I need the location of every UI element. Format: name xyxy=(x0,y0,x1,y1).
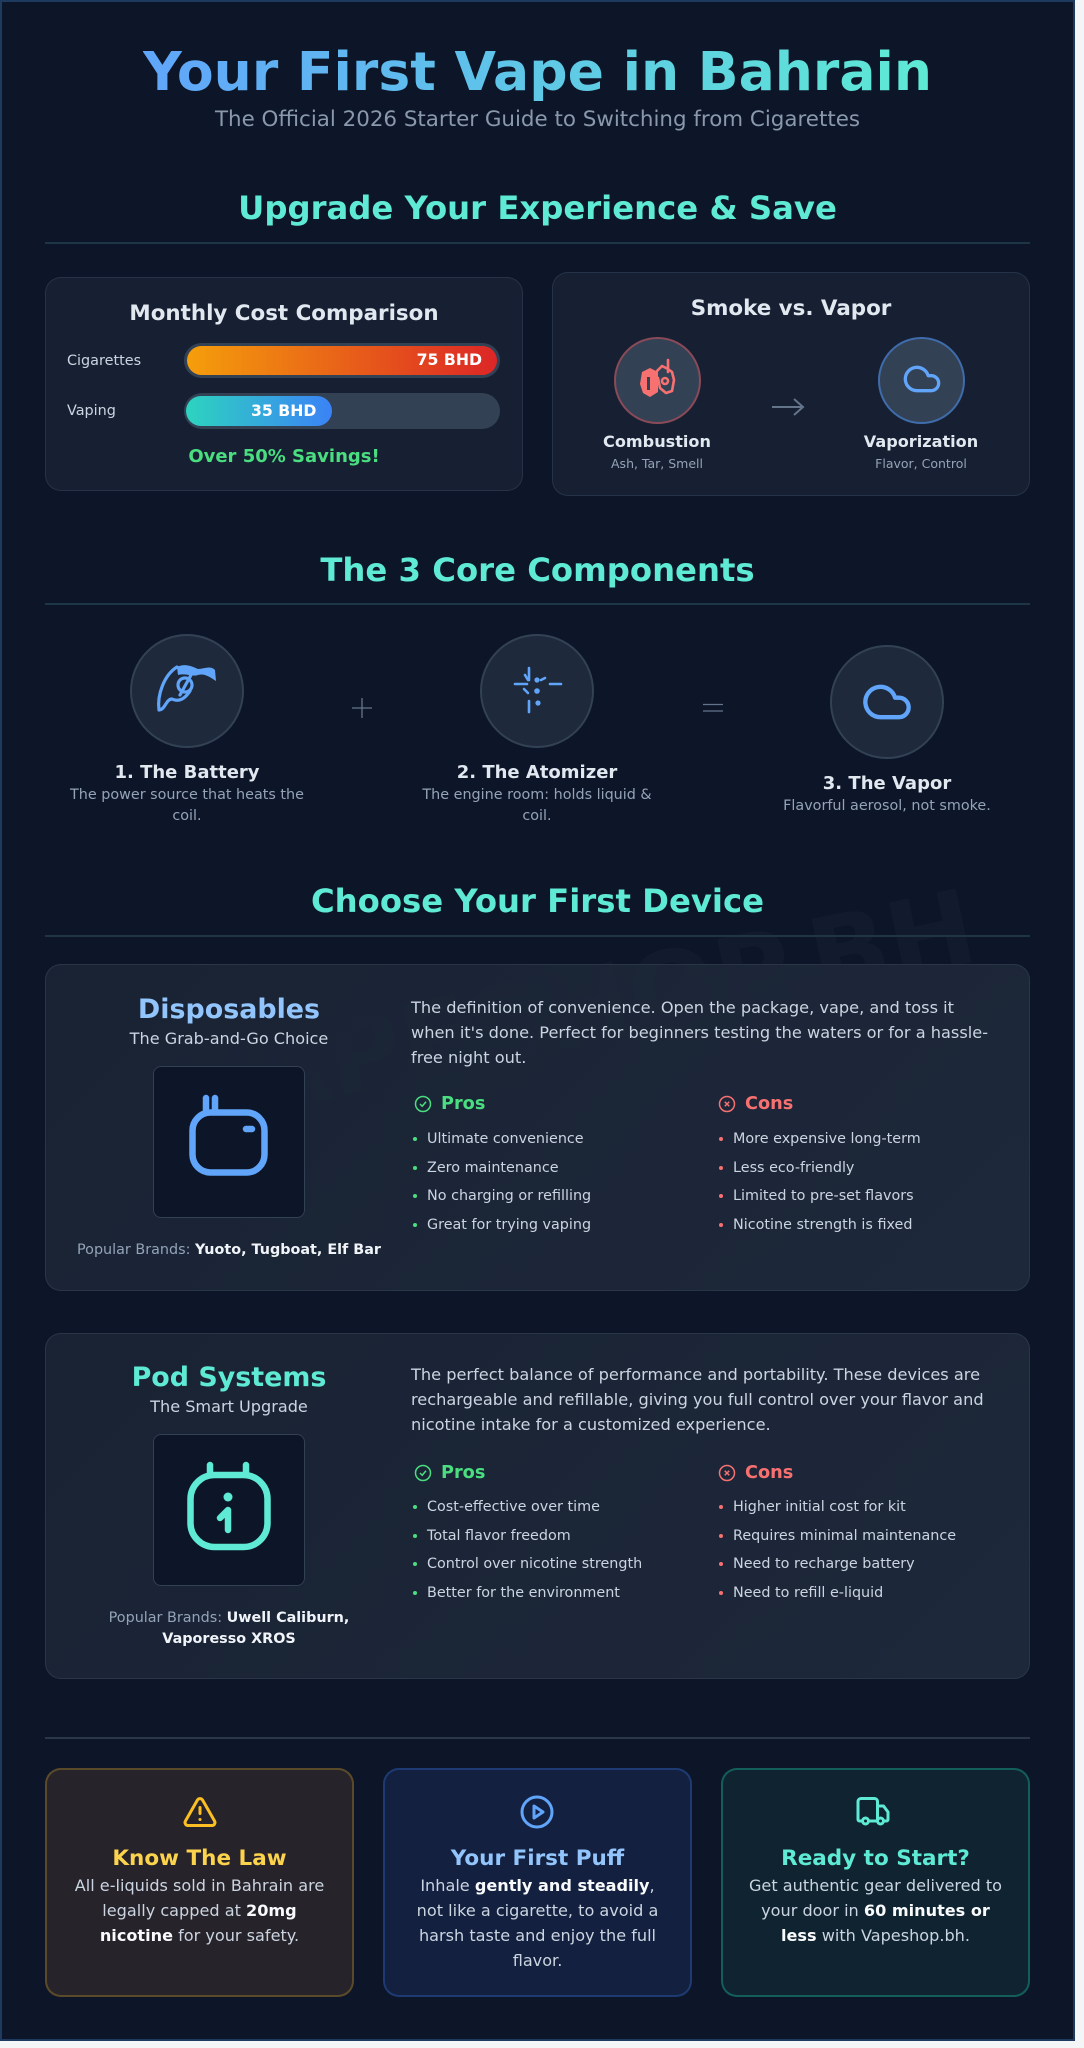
watermark: VAPESHOP.BH xyxy=(164,866,986,1154)
panel: disposables xyxy=(45,964,1030,1291)
bar: cigarettes 75 BHD xyxy=(184,343,500,378)
value: 35 BHD: 35 BHD xyxy=(251,401,316,420)
component: battery xyxy=(70,634,304,824)
description: battery: coil. xyxy=(172,808,202,824)
tip body: your door in 60 minutes or xyxy=(761,1901,990,1920)
tip body: legally capped at 20mg xyxy=(102,1901,297,1920)
name: vapor: 3. The Vapor xyxy=(823,773,951,794)
cons list: Higher initial cost for kit xyxy=(733,1499,906,1515)
tip body: nicotine for your safety. xyxy=(100,1926,299,1945)
device tagline: The Grab-and-Go Choice xyxy=(130,1029,328,1048)
cons list: More expensive long-term xyxy=(733,1131,921,1147)
caption: vaporization: Flavor, Control xyxy=(875,456,967,471)
description: battery: The power source that heats the xyxy=(70,787,304,803)
description: when it's done. Perfect for beginners testing the waters or for a hassle- xyxy=(411,1023,988,1042)
operator: equals xyxy=(703,704,723,712)
description xyxy=(410,1365,984,1434)
tip body: harsh taste and enjoy the full xyxy=(419,1926,656,1945)
bar: vaping 35 BHD xyxy=(184,393,500,429)
caption: combustion: Ash, Tar, Smell xyxy=(611,456,703,471)
cons heading: Cons xyxy=(745,1094,793,1114)
tip title: Know The Law xyxy=(112,1846,287,1871)
pros list: Zero maintenance xyxy=(427,1160,559,1176)
description: battery xyxy=(70,787,304,824)
smoke heading: Smoke vs. Vapor xyxy=(691,296,891,321)
pros heading xyxy=(414,1463,485,1483)
component: vapor xyxy=(783,645,991,814)
pros list: Ultimate convenience xyxy=(427,1131,584,1147)
icon: play xyxy=(520,1796,554,1828)
tip body: less with Vapeshop.bh. xyxy=(781,1926,970,1945)
cons heading: Cons xyxy=(745,1463,793,1483)
cons list: Need to recharge battery xyxy=(733,1556,915,1572)
icon: combustion flame xyxy=(614,337,701,424)
panel: know the law xyxy=(45,1768,354,1997)
value: 75 BHD: 75 BHD xyxy=(417,350,482,369)
operator: plus xyxy=(352,698,372,718)
cons list xyxy=(719,1131,921,1233)
cons list: Requires minimal maintenance xyxy=(733,1528,956,1544)
popular brands: Popular Brands: Yuoto, Tugboat, Elf Bar xyxy=(77,1242,381,1258)
popular brands: Popular Brands: Uwell Caliburn, xyxy=(109,1610,349,1626)
heading: components: The 3 Core Components xyxy=(320,551,755,589)
tip body: All e-liquids sold in Bahrain are xyxy=(75,1876,324,1895)
cons list xyxy=(719,1499,956,1601)
description: atomizer xyxy=(422,787,652,824)
tip body: Inhale gently and steadily, xyxy=(420,1876,655,1895)
description: atomizer: The engine room: holds liquid & xyxy=(422,787,652,803)
pros list: Better for the environment xyxy=(427,1585,620,1601)
cost heading: Monthly Cost Comparison xyxy=(129,301,439,326)
savings callout: Over 50% Savings! xyxy=(188,446,380,467)
pros heading xyxy=(414,1094,485,1114)
cons list: Need to refill e-liquid xyxy=(733,1585,883,1601)
tip body xyxy=(417,1876,658,1970)
label: vaping: Vaping xyxy=(67,403,116,419)
popular brands xyxy=(109,1610,349,1647)
description: nicotine intake for a customized experience. xyxy=(411,1415,771,1434)
tip body xyxy=(749,1876,1002,1945)
icon: battery xyxy=(130,634,244,748)
cons heading xyxy=(718,1094,793,1114)
arrow xyxy=(772,398,804,416)
icon: vapor cloud xyxy=(878,337,965,424)
component: atomizer xyxy=(422,634,652,824)
icon: vapor xyxy=(830,645,944,759)
tip body: flavor. xyxy=(513,1951,562,1970)
description: The definition of convenience. Open the package, vape, and toss it xyxy=(411,998,954,1017)
pros list: Cost-effective over time xyxy=(427,1499,600,1515)
tip body: Get authentic gear delivered to xyxy=(749,1876,1002,1895)
panel: smoke vs vapor xyxy=(552,272,1030,496)
title: Your First Vape in Bahrain xyxy=(143,40,932,103)
pros list: Total flavor freedom xyxy=(427,1528,571,1544)
description: The perfect balance of performance and portability. These devices are xyxy=(411,1365,980,1384)
label: combustion: Combustion xyxy=(603,432,711,451)
description: rechargeable and refillable, giving you full control over your flavor and xyxy=(411,1390,984,1409)
subtitle: The Official 2026 Starter Guide to Switching from Cigarettes xyxy=(215,107,860,132)
cons list: Limited to pre-set flavors xyxy=(733,1188,914,1204)
cons list: Less eco-friendly xyxy=(733,1160,854,1176)
icon: warning xyxy=(184,1797,216,1827)
icon: atomizer xyxy=(480,634,594,748)
tip title: Your First Puff xyxy=(451,1846,624,1871)
panel: monthly cost comparison xyxy=(45,277,523,491)
description: atomizer: coil. xyxy=(522,808,552,824)
cons list: Nicotine strength is fixed xyxy=(733,1217,912,1233)
device title: Pod Systems xyxy=(132,1362,326,1393)
name: battery: 1. The Battery xyxy=(114,762,260,783)
pros list: Great for trying vaping xyxy=(427,1217,591,1233)
pros list: No charging or refilling xyxy=(427,1188,591,1204)
tip body: not like a cigarette, to avoid a xyxy=(417,1901,658,1920)
heading: devices: Choose Your First Device xyxy=(311,882,764,920)
popular brands: Vaporesso XROS xyxy=(162,1631,296,1647)
cons heading xyxy=(718,1463,793,1483)
heading: upgrade: Upgrade Your Experience & Save xyxy=(238,189,837,227)
pros heading: Pros xyxy=(441,1094,485,1114)
description: free night out. xyxy=(411,1048,526,1067)
pros heading: Pros xyxy=(441,1463,485,1483)
pros list xyxy=(413,1131,591,1233)
device image: pod xyxy=(153,1434,305,1586)
panel: your first puff xyxy=(383,1768,692,1997)
device image: disposable xyxy=(153,1066,305,1218)
description xyxy=(410,998,988,1067)
pros list xyxy=(413,1499,642,1601)
panel: pod systems xyxy=(45,1333,1030,1679)
pros list: Control over nicotine strength xyxy=(427,1556,642,1572)
label: cigarettes: Cigarettes xyxy=(67,353,141,369)
device tagline: The Smart Upgrade xyxy=(150,1397,308,1416)
tip title: Ready to Start? xyxy=(781,1846,970,1871)
name: atomizer: 2. The Atomizer xyxy=(457,762,617,783)
label: vaporization: Vaporization xyxy=(864,432,978,451)
tip body xyxy=(74,1876,324,1945)
description: vapor: Flavorful aerosol, not smoke. xyxy=(783,798,991,814)
icon: truck xyxy=(856,1797,890,1826)
panel: ready to start xyxy=(721,1768,1030,1997)
device title: Disposables xyxy=(138,994,320,1025)
